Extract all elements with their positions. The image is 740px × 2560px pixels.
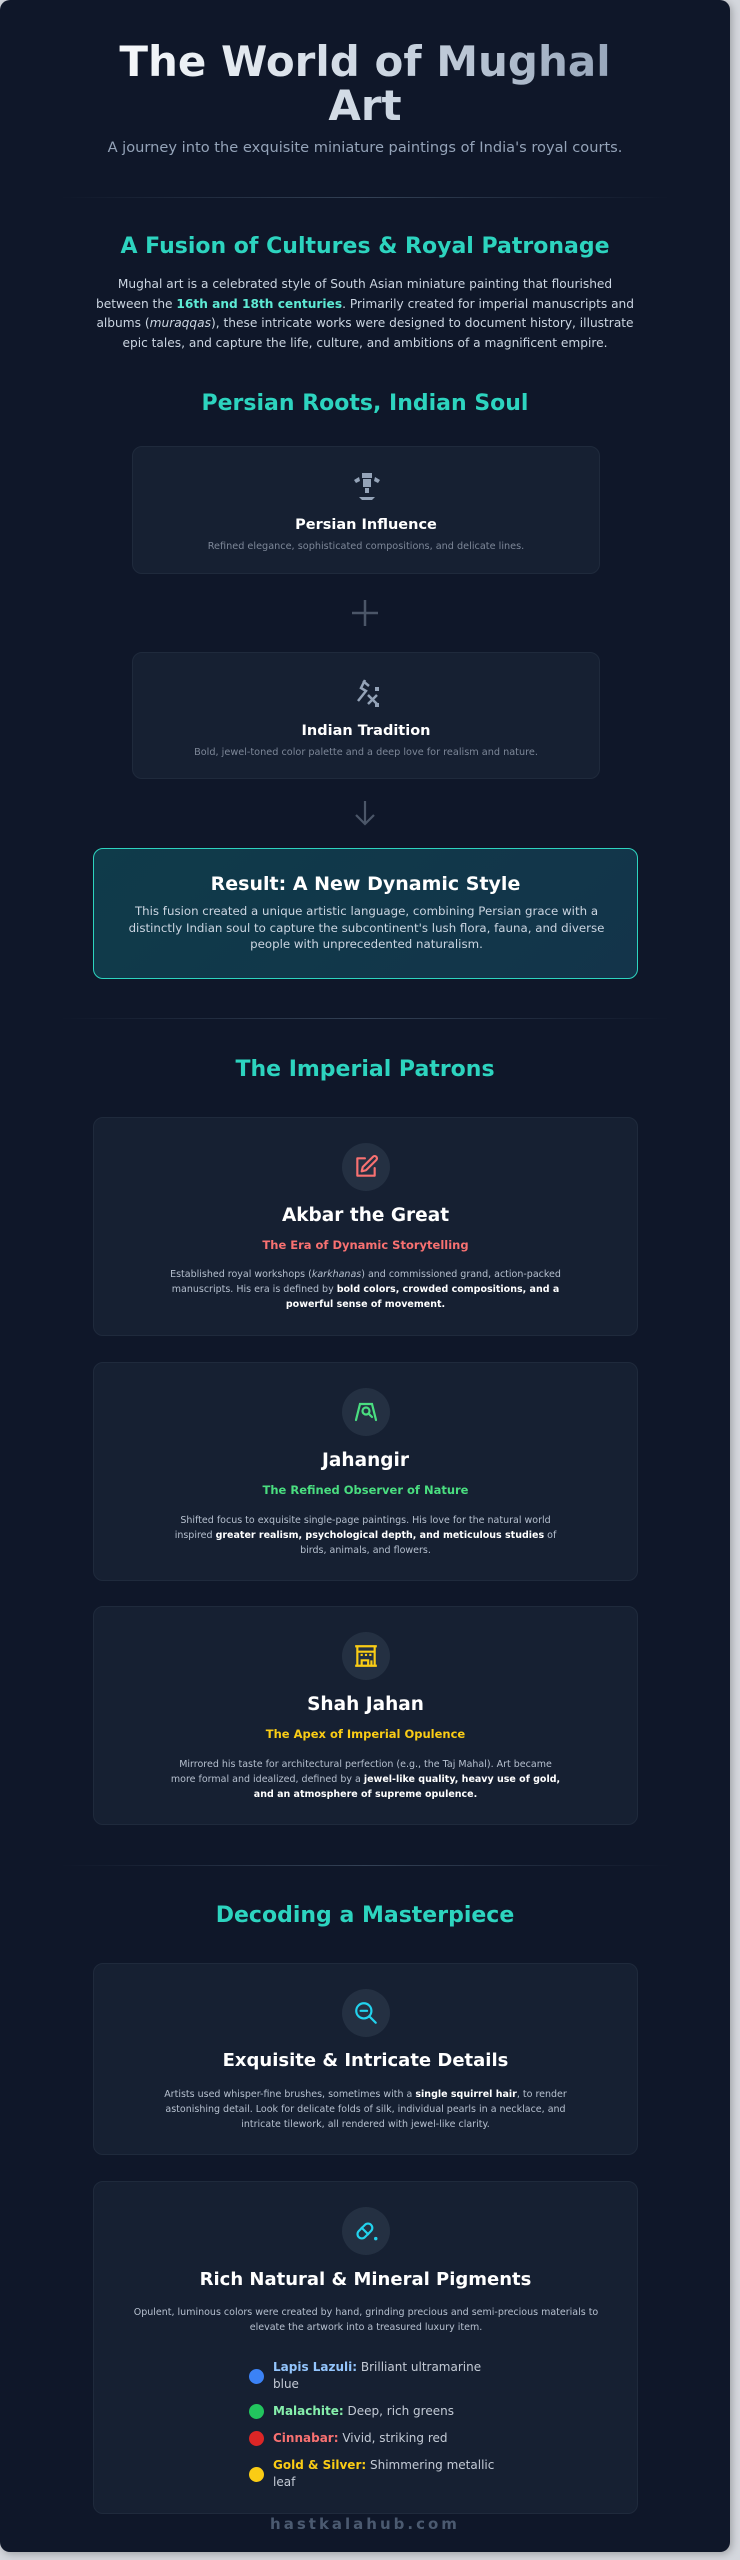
pigment list	[249, 2360, 494, 2489]
text: This fusion created a unique artistic language, combining Persian grace with a distinctly Indian soul to capture the subcontinent's lush flora, fauna, and diverse people with unprecedented naturalism.	[129, 904, 604, 951]
text: Artists used whisper-fine brushes, sometimes with a single squirrel hair, to render astonishing detail. Look for delicate folds of silk, individual pearls in a necklace, and intricate tilework, all rendered with jewel-like clarity.	[164, 2089, 567, 2130]
title: Rich Natural & Mineral Pigments	[200, 2269, 531, 2290]
text: Mirrored his taste for architectural perfection (e.g., the Taj Mahal). Art became more formal and idealized, defined by a jewel-like quality, heavy use of gold, and an atmosphere of supreme opulence.	[171, 1759, 560, 1800]
subtitle: The Era of Dynamic Storytelling	[262, 1238, 469, 1252]
arrow: down	[355, 801, 375, 826]
heading: decoding: Decoding a Masterpiece	[216, 1903, 514, 1928]
panel: akbar	[93, 1117, 638, 1336]
title: indian tradition: Indian Tradition	[302, 723, 430, 739]
pigment: cinnabar: Cinnabar: Vivid, striking red	[273, 2431, 448, 2445]
icon: building	[342, 1632, 390, 1680]
icon: persian	[354, 473, 380, 500]
icon: pencil	[342, 1143, 390, 1191]
subtitle: A journey into the exquisite miniature paintings of India's royal courts.	[108, 139, 622, 156]
heading: imperial patrons: The Imperial Patrons	[235, 1057, 495, 1082]
text: Opulent, luminous colors were created by hand, grinding precious and semi-precious materials to elevate the artwork into a treasured luxury item.	[134, 2307, 598, 2333]
title: persian influence: Persian Influence	[295, 517, 437, 533]
panel: indian tradition	[132, 652, 600, 779]
footer: hastkalahub.com	[270, 2515, 460, 2533]
panel: shah jahan	[93, 1606, 638, 1825]
icon: plus	[352, 600, 378, 626]
title: result: Result: A New Dynamic Style	[211, 873, 520, 895]
callout: result	[93, 848, 638, 979]
icon: magnifier	[342, 1989, 390, 2037]
panel: details	[93, 1963, 638, 2155]
panel: persian influence	[132, 446, 600, 574]
title: Akbar the Great	[282, 1205, 449, 1226]
intro paragraph: Mughal art is a celebrated style of South Asian miniature painting that flourished between the 16th and 18th centuries. Primarily created for imperial manuscripts and albums (muraqqas), these intricate works were designed to document history, illustrate epic tales, and capture the life, culture, and ambitions of a magnificent empire.	[96, 277, 634, 350]
icon: nature observer	[342, 1388, 390, 1436]
text: Refined elegance, sophisticated compositions, and delicate lines.	[208, 541, 524, 552]
text: Shifted focus to exquisite single-page paintings. His love for the natural world inspired greater realism, psychological depth, and meticulous studies of birds, animals, and flowers.	[175, 1515, 556, 1556]
heading: persian roots: Persian Roots, Indian Soul	[202, 391, 528, 416]
pigment: lapis: Lapis Lazuli: Brilliant ultramarine blue	[273, 2360, 481, 2391]
heading: fusion: A Fusion of Cultures & Royal Patronage	[120, 234, 610, 259]
subtitle: The Apex of Imperial Opulence	[266, 1727, 465, 1741]
icon: pill	[342, 2207, 390, 2255]
panel: jahangir	[93, 1362, 638, 1581]
text: Established royal workshops (karkhanas) and commissioned grand, action-packed manuscripts. His era is defined by bold colors, crowded compositions, and a powerful sense of movement.	[170, 1269, 561, 1310]
title: Jahangir	[322, 1450, 409, 1471]
pigment: gold: Gold & Silver: Shimmering metallic leaf	[273, 2458, 494, 2489]
panel: pigments	[93, 2181, 638, 2514]
title: The World of Mughal Art	[119, 37, 611, 130]
title: Shah Jahan	[307, 1694, 424, 1715]
pigment: malachite: Malachite: Deep, rich greens	[273, 2404, 454, 2418]
text: Bold, jewel-toned color palette and a deep love for realism and nature.	[194, 747, 538, 758]
subtitle: The Refined Observer of Nature	[262, 1483, 468, 1497]
icon: indian	[357, 680, 379, 707]
title: Exquisite & Intricate Details	[223, 2050, 508, 2071]
